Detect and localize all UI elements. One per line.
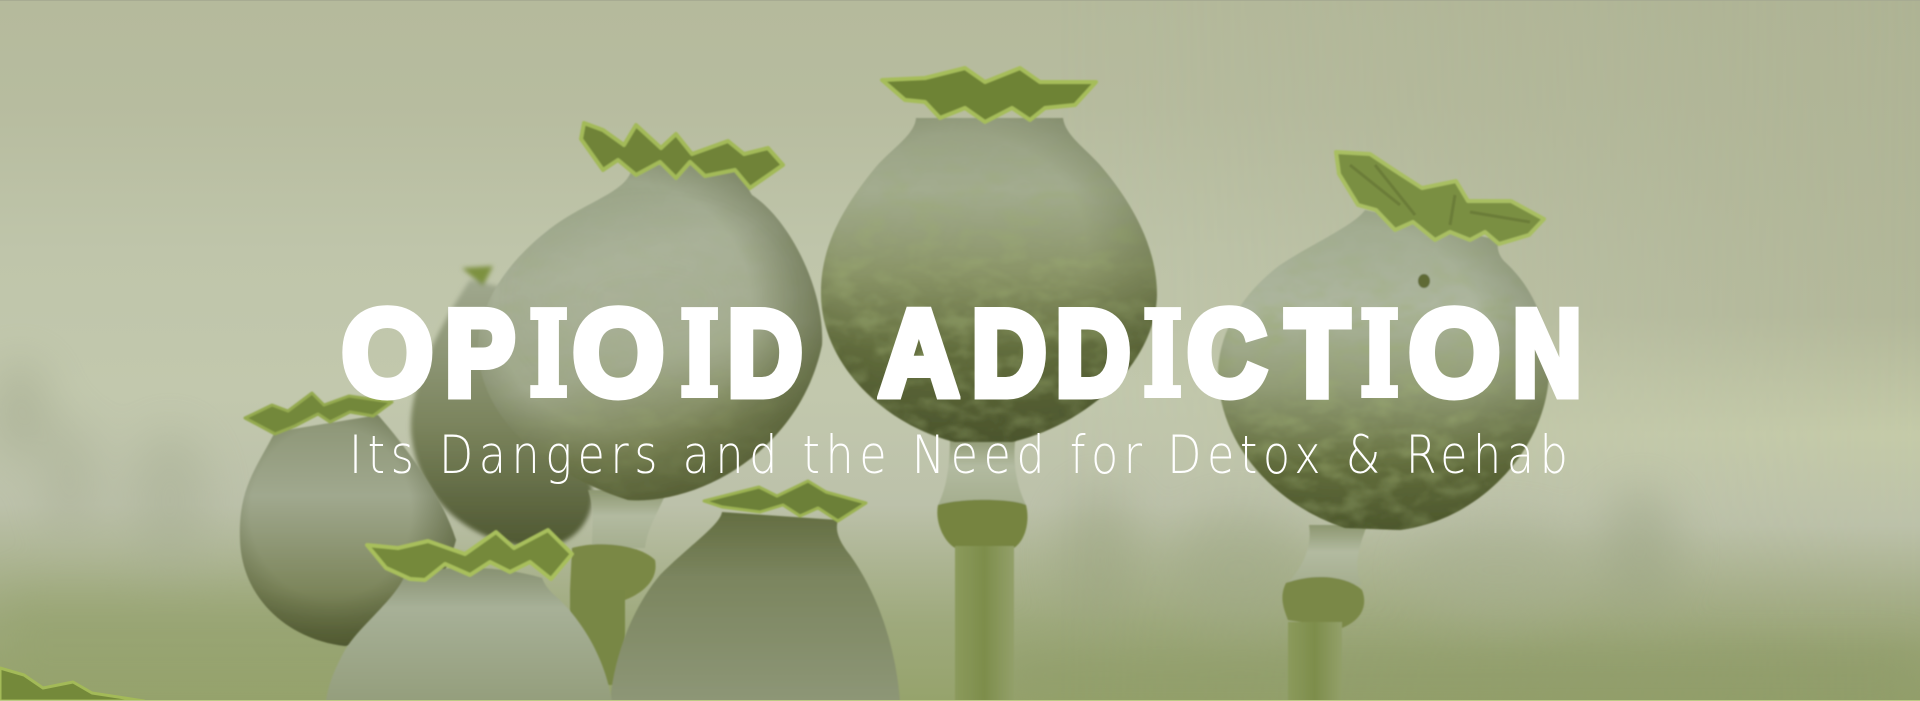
dark spot on pod [1418,274,1430,288]
title: O [1409,285,1500,421]
pod: right with leafy crown [1210,152,1555,535]
title: I [1142,287,1183,423]
crown: right pod [1336,152,1544,244]
title: D [972,285,1046,421]
title: I [1359,287,1400,423]
pod: far back behind large left pod [411,266,593,548]
title: A [879,285,958,421]
title: P [445,285,515,421]
pod: large left [475,123,825,505]
crown: centre pod [882,68,1096,122]
title: I [679,287,720,423]
title: D [727,285,802,421]
pod: bottom centre [610,481,900,701]
stem: right pod [1282,525,1367,701]
pod: bottom front left [326,530,612,701]
title: D [1056,285,1130,421]
bottom edge line [0,700,1920,701]
title: O [573,285,664,421]
top edge line [0,0,1920,1]
stem: centre pod [937,435,1028,701]
crown: bottom front pod [367,530,572,580]
pod: small blurred left [240,393,456,646]
stem: large left pod [570,490,667,685]
title: C [1187,285,1266,421]
subtitle: Its Dangers and the Need for Detox & Rehab [349,424,1568,486]
title: O [342,285,433,421]
crown: corner pod [0,668,144,701]
title: N [1513,285,1581,421]
title: I [528,287,569,423]
pod: centre tall [815,68,1165,450]
crown: large left pod [581,123,783,188]
title: T [1286,285,1349,421]
